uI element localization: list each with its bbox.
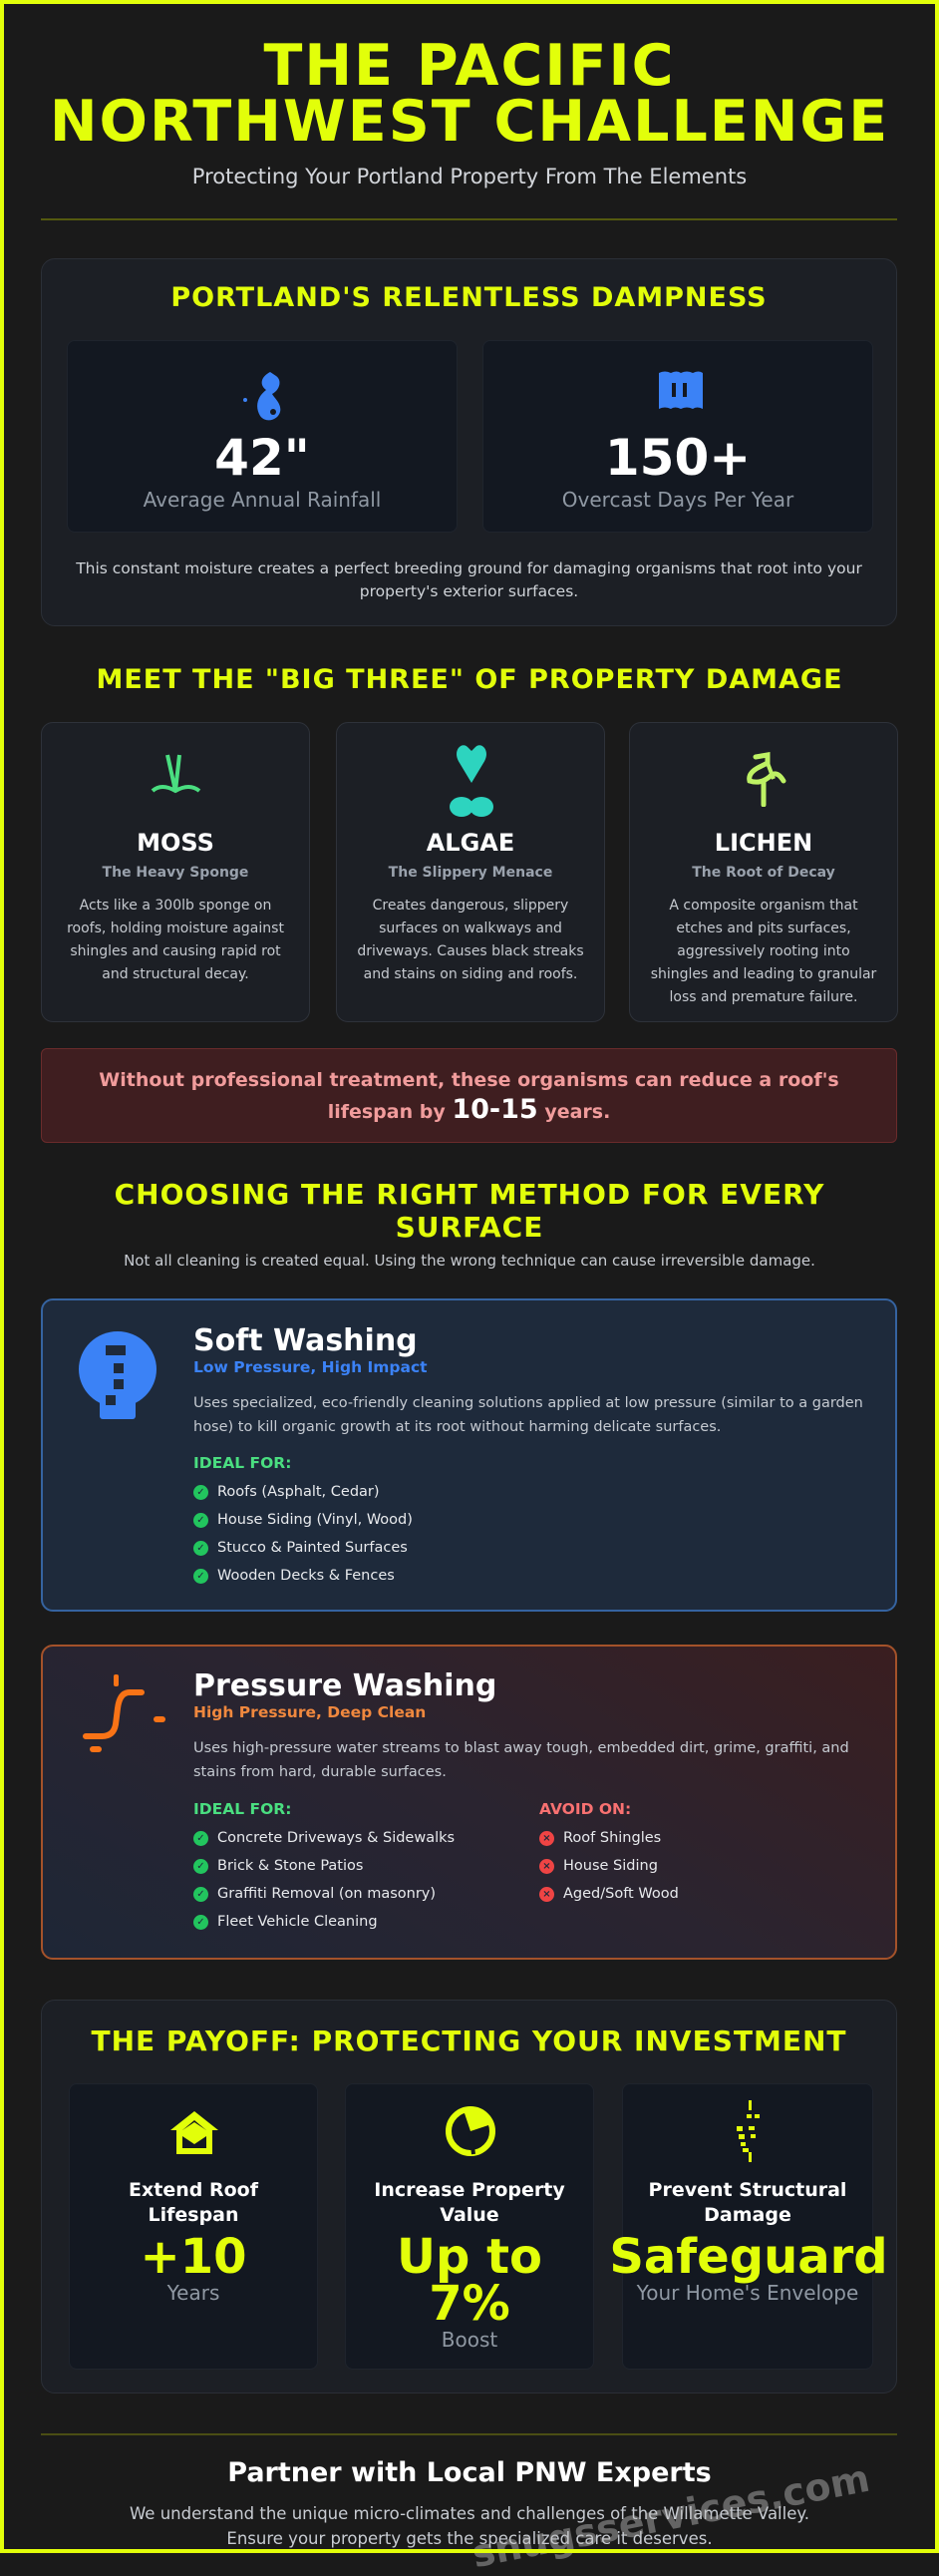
ideal list: Concrete Driveways & Sidewalks [217,1830,455,1846]
card: property value: Value [440,2204,499,2226]
icon: cloud calendar [659,371,703,409]
avoid list: Roof Shingles [563,1830,661,1846]
ideal list: ✓ [196,1917,205,1928]
callout: lifespan warning: Without professional treatment, these organisms can reduce a roof's [99,1069,839,1091]
ideal list: ✓ [196,1571,205,1582]
ideal list: ✓ [196,1543,205,1554]
card: moss: MOSS [137,829,214,857]
title: Pressure Washing [193,1668,496,1703]
card: structural: Safeguard [609,2229,888,2285]
ideal list: Wooden Decks & Fences [217,1568,395,1584]
card: property value: Increase Property [374,2179,565,2201]
card: lichen [629,722,898,1022]
card: property value: 7% [429,2276,510,2332]
label: Overcast Days Per Year [562,488,793,512]
icon: pressure wand [83,1674,165,1752]
title: Soft Washing [193,1323,418,1358]
text: closing: Ensure your property gets the specialized care it deserves. [226,2529,713,2548]
ideal list: ✓ [196,1515,205,1526]
stat: overcast [482,340,873,533]
panel: payoff [41,2000,897,2393]
panel: pressure washing [41,1645,897,1960]
icon: chart [446,2106,495,2156]
icon: shield dots [737,2100,760,2162]
text: not all cleaning: Not all cleaning is created equal. Using the wrong technique can cause irreversible damage. [124,1252,815,1270]
ideal list: Stucco & Painted Surfaces [217,1540,408,1556]
card: lichen: The Root of Decay [692,865,835,881]
card: structural: Prevent Structural [649,2179,846,2201]
subtitle: Protecting Your Portland Property From The Elements [192,165,747,188]
number: 42": 42" [214,429,310,487]
card: algae: Creates dangerous, slippery surfaces on walkways and driveways. Causes black streaks and stains on siding and roofs. [357,898,584,982]
text: closing: We understand the unique micro-climates and challenges of the Willamette Valley. [130,2504,809,2523]
ideal list: ✓ [196,1861,205,1872]
card: roof lifespan: Extend Roof [129,2179,258,2201]
ideal list: IDEAL FOR: [193,1454,291,1472]
panel: dampness [41,258,897,626]
ideal list: ✓ [196,1889,205,1900]
ideal list: IDEAL FOR: [193,1800,291,1818]
card: roof lifespan: Lifespan [148,2204,239,2226]
card: lichen: LICHEN [715,829,812,857]
text: moisture: This constant moisture creates a perfect breeding ground for damaging organisms that root into your property's exterior surfaces. [76,559,862,600]
heading: partner: Partner with Local PNW Experts [227,2457,712,2488]
text: closing [130,2504,809,2548]
ideal list [193,1800,455,1930]
card: lichen: A composite organism that etches and pits surfaces, aggressively rooting into shingles and leading to granular loss and premature failure. [651,898,876,1005]
card: algae: The Slippery Menace [389,865,552,881]
icon: lichen [747,752,785,807]
ideal list: Brick & Stone Patios [217,1858,363,1874]
avoid list: × [542,1861,551,1872]
heading: choosing method: CHOOSING THE RIGHT METHOD FOR EVERY SURFACE [115,1178,824,1244]
title: NORTHWEST CHALLENGE [50,89,889,155]
ideal list: House Siding (Vinyl, Wood) [217,1512,413,1528]
card: structural: Your Home's Envelope [637,2281,858,2305]
panel: soft washing [41,1298,897,1612]
card: property value: Boost [442,2328,497,2352]
stat: rainfall [67,340,458,533]
icon: soft wash bottle [79,1331,156,1419]
subtitle: High Pressure, Deep Clean [193,1703,426,1721]
card: structural [622,2083,873,2370]
title [50,33,889,155]
avoid list [539,1800,679,1902]
icon: house [170,2111,218,2154]
avoid list: House Siding [563,1858,658,1874]
card: algae: ALGAE [427,829,514,857]
card: roof lifespan [69,2083,318,2370]
card: moss: Acts like a 300lb sponge on roofs, holding moisture against shingles and causing rapid rot and structural decay. [67,898,284,982]
icon: moss [152,754,201,794]
callout: lifespan warning [41,1048,897,1143]
ideal list: Fleet Vehicle Cleaning [217,1914,378,1930]
card: roof lifespan: +10 [140,2229,247,2285]
avoid list: × [542,1889,551,1900]
ideal list: Roofs (Asphalt, Cedar) [217,1484,380,1500]
heading: payoff: THE PAYOFF: PROTECTING YOUR INVESTMENT [91,2024,847,2057]
icon: rain drop [243,372,281,421]
callout: lifespan warning: lifespan by 10-15 years. [328,1094,610,1125]
avoid list: × [542,1833,551,1844]
description: Uses high-pressure water streams to blast away tough, embedded dirt, grime, graffiti, and stains from hard, durable surfaces. [193,1740,849,1780]
card: structural: Damage [704,2204,791,2226]
card: roof lifespan: Years [167,2281,219,2305]
heading: dampness: PORTLAND'S RELENTLESS DAMPNESS [170,282,768,313]
description: Uses specialized, eco-friendly cleaning solutions applied at low pressure (similar to a garden hose) to kill organic growth at its root without harming delicate surfaces. [193,1395,863,1435]
ideal list: Graffiti Removal (on masonry) [217,1886,436,1902]
ideal list: ✓ [196,1487,205,1498]
avoid list: AVOID ON: [539,1800,631,1818]
number: 150+: 150+ [605,429,751,487]
card: property value: Up to [397,2229,542,2285]
card: property value [345,2083,594,2370]
heading: big three: MEET THE "BIG THREE" OF PROPERTY DAMAGE [96,664,843,695]
ideal list [193,1454,413,1584]
card: moss: The Heavy Sponge [103,865,248,881]
title: THE PACIFIC [263,33,676,99]
avoid list: Aged/Soft Wood [563,1886,679,1902]
card: moss [41,722,310,1022]
subtitle: Low Pressure, High Impact [193,1358,428,1376]
ideal list: ✓ [196,1833,205,1844]
icon: algae [450,745,493,817]
label: Average Annual Rainfall [144,488,381,512]
card: algae [336,722,605,1022]
watermark: snugsservices.com [469,2456,873,2576]
